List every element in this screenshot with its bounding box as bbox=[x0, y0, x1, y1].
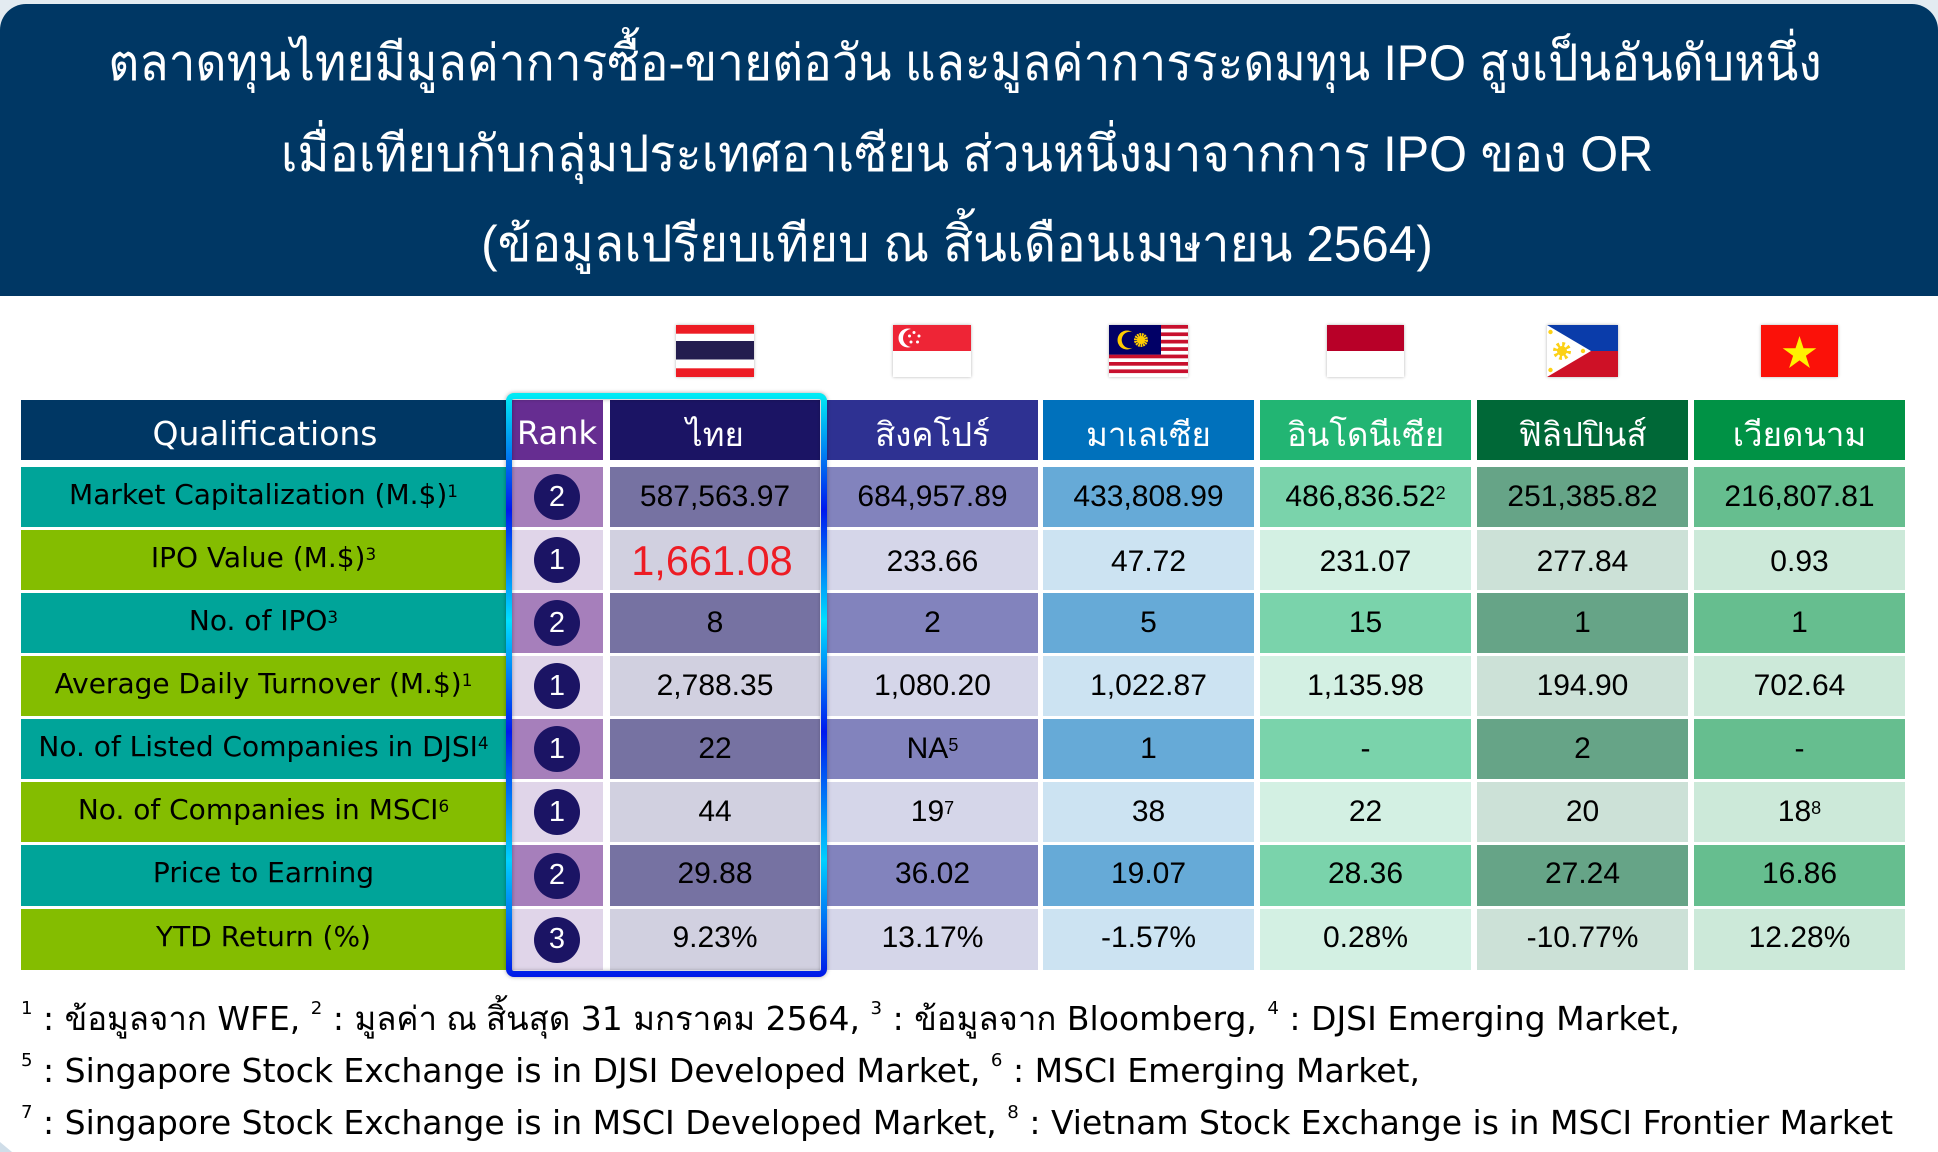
row: No. of Listed Companies in DJSI: 22 bbox=[698, 732, 732, 765]
row: No. of Companies in MSCI bbox=[21, 782, 1905, 842]
row: No. of Companies in MSCI: 7 bbox=[944, 798, 954, 818]
row: Average Daily Turnover: 702.64 bbox=[1754, 669, 1845, 702]
row: No. of Listed Companies in DJSI: NA bbox=[907, 732, 948, 765]
row: Price to Earning bbox=[21, 845, 1905, 906]
header: Malaysia: มาเลเซีย bbox=[1086, 416, 1211, 452]
row: No. of Listed Companies in DJSI: - bbox=[1794, 732, 1804, 765]
row: No. of Companies in MSCI: 44 bbox=[698, 795, 732, 828]
table header row bbox=[21, 400, 1905, 460]
row: YTD Return: 12.28% bbox=[1749, 921, 1850, 954]
row: No. of Listed Companies in DJSI: 1 bbox=[549, 732, 565, 764]
row: No. of IPO: 2 bbox=[549, 606, 565, 638]
header: Singapore bbox=[827, 400, 1038, 460]
row: No. of Listed Companies in DJSI bbox=[21, 719, 1905, 779]
row: Market Capitalization: 1 bbox=[447, 481, 458, 501]
title line 2: เมื่อเทียบกับกลุ่มประเทศอาเซียน ส่วนหนึ่งมาจากการ IPO ของ OR bbox=[281, 126, 1653, 182]
row: Market Capitalization: 2 bbox=[1436, 483, 1446, 503]
row: No. of Companies in MSCI: 38 bbox=[1132, 795, 1165, 828]
row: IPO Value: 1 bbox=[549, 544, 565, 576]
row: No. of Companies in MSCI: 22 bbox=[1349, 795, 1382, 828]
row: No. of Listed Companies in DJSI: No. of Listed Companies in DJSI bbox=[38, 730, 478, 762]
corner accent bottom-left bbox=[0, 1142, 12, 1152]
row: No. of Companies in MSCI: 8 bbox=[1811, 798, 1821, 818]
flag: Vietnam bbox=[1761, 325, 1838, 377]
header: Rank bbox=[511, 400, 603, 460]
title line 1: ตลาดทุนไทยมีมูลค่าการซื้อ-ขายต่อวัน และมูลค่าการระดมทุน IPO สูงเป็นอันดับหนึ่ง bbox=[108, 35, 1822, 91]
row: No. of Listed Companies in DJSI: 4 bbox=[478, 733, 489, 753]
row: No. of IPO: No. of IPO bbox=[189, 604, 327, 636]
row: Market Capitalization: Market Capitalization (M.$) bbox=[69, 478, 447, 510]
row: Average Daily Turnover: Average Daily Turnover (M.$) bbox=[55, 666, 462, 700]
row: No. of IPO: 1 bbox=[1791, 606, 1808, 639]
row: No. of Companies in MSCI: 19 bbox=[911, 795, 944, 828]
row: Price to Earning: 36.02 bbox=[895, 857, 970, 890]
row: Price to Earning: 28.36 bbox=[1328, 857, 1403, 890]
row: Price to Earning: 2 bbox=[549, 859, 565, 891]
row: YTD Return: -1.57% bbox=[1101, 921, 1196, 954]
row: Price to Earning: 27.24 bbox=[1545, 857, 1620, 890]
footnote line 1: 1 : ข้อมูลจาก WFE, 2 : มูลค่า ณ สิ้นสุด 31 มกราคม 2564, 3 : ข้อมูลจาก Bloomberg, 4 : DJSI Emerging Market, bbox=[21, 998, 1680, 1038]
row: Price to Earning: 19.07 bbox=[1111, 857, 1186, 890]
row: No. of IPO: 5 bbox=[1140, 606, 1157, 639]
row: Market Capitalization bbox=[21, 467, 1905, 527]
row: Average Daily Turnover: 1,080.20 bbox=[874, 669, 991, 702]
header: Indonesia bbox=[1260, 400, 1471, 460]
flag: Singapore bbox=[893, 325, 971, 377]
row: No. of Listed Companies in DJSI: 1 bbox=[1140, 732, 1157, 765]
row: YTD Return: -10.77% bbox=[1527, 921, 1638, 954]
row: IPO Value: 0.93 bbox=[1770, 544, 1829, 578]
footnote line 2: 5 : Singapore Stock Exchange is in DJSI Developed Market, 6 : MSCI Emerging Market, bbox=[21, 1050, 1420, 1090]
row: IPO Value: 277.84 bbox=[1537, 544, 1628, 578]
header: Vietnam: เวียดนาม bbox=[1733, 416, 1866, 452]
header: Vietnam bbox=[1694, 400, 1905, 460]
row: Price to Earning: 16.86 bbox=[1762, 857, 1837, 890]
row: No. of IPO: 3 bbox=[327, 607, 338, 627]
row: No. of Listed Companies in DJSI: 5 bbox=[948, 735, 958, 755]
row: YTD Return: YTD Return (%) bbox=[156, 920, 371, 953]
row: Market Capitalization: 216,807.81 bbox=[1724, 480, 1875, 513]
highlight frame around Thailand columns bbox=[503, 390, 830, 980]
header banner bbox=[0, 0, 1938, 296]
row: Market Capitalization: 684,957.89 bbox=[857, 480, 1008, 513]
row: Price to Earning: 29.88 bbox=[677, 857, 753, 890]
row: No. of Listed Companies in DJSI: - bbox=[1360, 732, 1370, 765]
row: IPO Value: 231.07 bbox=[1320, 544, 1411, 578]
row: Market Capitalization: 251,385.82 bbox=[1507, 480, 1658, 513]
row: Average Daily Turnover bbox=[21, 656, 1905, 716]
row: No. of Companies in MSCI: 6 bbox=[438, 796, 449, 816]
row: YTD Return: 0.28% bbox=[1323, 921, 1408, 954]
header: Thailand bbox=[610, 400, 820, 460]
row: No. of IPO: 1 bbox=[1574, 606, 1591, 639]
row: No. of IPO: 15 bbox=[1349, 606, 1382, 639]
title line 3: (ข้อมูลเปรียบเทียบ ณ สิ้นเดือนเมษายน 2564) bbox=[481, 216, 1433, 272]
row: IPO Value: IPO Value (M.$) bbox=[151, 540, 365, 574]
row: Average Daily Turnover: 194.90 bbox=[1537, 669, 1628, 702]
row: Market Capitalization: 2 bbox=[549, 480, 565, 512]
flag: Thailand bbox=[676, 325, 754, 377]
flag: Malaysia bbox=[1109, 325, 1188, 377]
row: Average Daily Turnover: 1,022.87 bbox=[1090, 669, 1207, 702]
row: IPO Value: 3 bbox=[365, 544, 376, 564]
row: IPO Value: 1,661.08 bbox=[631, 536, 793, 584]
row: Average Daily Turnover: 1,135.98 bbox=[1307, 669, 1424, 702]
row: YTD Return: 13.17% bbox=[882, 921, 983, 954]
header: Qualifications bbox=[21, 400, 506, 460]
row: IPO Value bbox=[21, 530, 1905, 590]
flag: Philippines bbox=[1547, 325, 1618, 377]
row: IPO Value: 233.66 bbox=[887, 544, 978, 578]
row: Market Capitalization: 587,563.97 bbox=[640, 480, 790, 513]
header: Rank: Rank bbox=[517, 414, 597, 452]
row: Average Daily Turnover: 1 bbox=[462, 670, 472, 690]
header: Thailand: ไทย bbox=[686, 416, 744, 452]
row: No. of IPO: 8 bbox=[707, 606, 723, 639]
row: No. of IPO: 2 bbox=[924, 606, 941, 639]
row: No. of Companies in MSCI: 18 bbox=[1778, 795, 1811, 828]
header: Singapore: สิงคโปร์ bbox=[875, 416, 990, 452]
row: No. of Companies in MSCI: 20 bbox=[1566, 795, 1599, 828]
header: Malaysia bbox=[1043, 400, 1254, 460]
flag: Indonesia bbox=[1327, 325, 1404, 377]
header: Qualifications: Qualifications bbox=[152, 414, 378, 452]
header: Indonesia: อินโดนีเซีย bbox=[1287, 416, 1444, 452]
row: No. of Companies in MSCI: No. of Companies in MSCI bbox=[78, 792, 438, 826]
row: No. of IPO bbox=[21, 593, 1905, 653]
row: No. of Companies in MSCI: 1 bbox=[549, 796, 565, 828]
row: Average Daily Turnover: 1 bbox=[549, 670, 565, 702]
row: No. of Listed Companies in DJSI: 2 bbox=[1574, 732, 1591, 765]
footnote line 3: 7 : Singapore Stock Exchange is in MSCI Developed Market, 8 : Vietnam Stock Exchange is in MSCI Frontier Market bbox=[21, 1102, 1893, 1142]
row: Average Daily Turnover: 2,788.35 bbox=[657, 669, 773, 702]
row: YTD Return: 9.23% bbox=[672, 921, 758, 954]
row: Market Capitalization: 433,808.99 bbox=[1073, 480, 1224, 513]
row: YTD Return: 3 bbox=[549, 923, 565, 955]
row: IPO Value: 47.72 bbox=[1111, 544, 1186, 578]
header: Philippines: ฟิลิปปินส์ bbox=[1518, 416, 1647, 452]
row: Market Capitalization: 486,836.52 bbox=[1285, 480, 1436, 513]
row: Price to Earning: Price to Earning bbox=[153, 856, 374, 889]
header: Philippines bbox=[1477, 400, 1688, 460]
row: YTD Return bbox=[21, 909, 1905, 970]
